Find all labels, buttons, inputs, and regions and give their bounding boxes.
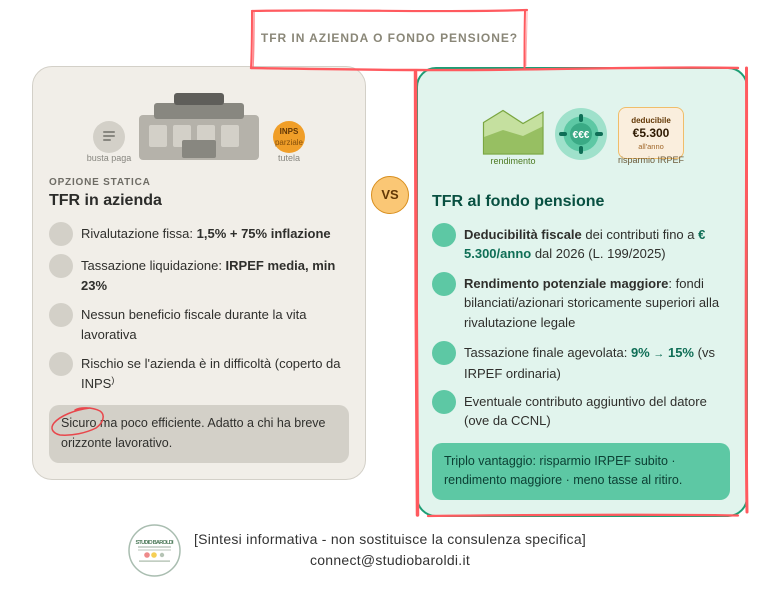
list item 4: Eventuale contributo aggiuntivo del datore — [464, 394, 707, 408]
list item 3: Tassazione finale agevolata: 9% → 15% (vs — [464, 344, 715, 360]
list item 2: 23% — [81, 278, 107, 292]
list item 1 — [432, 223, 706, 261]
list item 3 — [49, 303, 306, 342]
heading: TFR al fondo pensione: TFR al fondo pensione — [432, 193, 604, 210]
card: deducibile — [618, 107, 684, 159]
list item 1: 5.300/anno dal 2026 (L. 199/2025) — [464, 246, 666, 261]
callout: azienda — [49, 405, 349, 463]
heading: TFR in azienda: TFR in azienda — [49, 192, 162, 209]
list item 4 — [432, 390, 707, 428]
label: risparmio IRPEF: risparmio IRPEF — [618, 155, 684, 165]
callout: azienda: Sicuro ma poco efficiente. Adatto a chi ha breve — [61, 416, 326, 430]
badge: VS — [371, 176, 409, 214]
icon: azienda building — [139, 93, 259, 160]
callout: azienda: orizzonte lavorativo. — [61, 436, 172, 450]
list item 2: bilanciati/azionari storicamente superiori alla — [464, 295, 719, 310]
list item 4: (ove da CCNL) — [464, 413, 551, 428]
list item 2: Tassazione liquidazione: IRPEF media, min — [81, 258, 335, 273]
label: rendimento: rendimento — [490, 156, 536, 166]
list item 1 — [49, 222, 331, 246]
logo: Studio Baroldi: STUDIO BAROLDI — [136, 540, 174, 546]
list item 3: IRPEF ordinaria) — [464, 366, 561, 381]
callout: fondo pensione — [432, 443, 730, 500]
list item 2: rivalutazione legale — [464, 314, 575, 330]
list item 2: Rendimento potenziale maggiore: fondi — [464, 276, 704, 290]
footer text: [Sintesi informativa - non sostituisce la consulenza specifica] — [194, 531, 586, 547]
list item 4: INPS) — [81, 374, 114, 390]
list item 2 — [432, 272, 720, 330]
list item 1: Rivalutazione fissa: 1,5% + 75% inflazione — [81, 226, 331, 241]
list item 3: lavorativa — [81, 326, 137, 342]
callout: fondo pensione: rendimento maggiore · meno tasse al ritiro. — [444, 473, 682, 487]
title: TFR IN AZIENDA O FONDO PENSIONE? — [261, 31, 518, 45]
list item 3 — [432, 341, 715, 381]
list item 1: Deducibilità fiscale dei contributi fino a € — [464, 226, 705, 242]
list item 4: Rischio se l'azienda è in difficoltà (coperto da — [81, 356, 340, 371]
card: deducibile: deducibile — [631, 116, 671, 124]
label: busta paga: busta paga — [87, 153, 131, 163]
logo: Studio Baroldi — [128, 524, 181, 577]
icon: rendimento area chart — [482, 110, 544, 155]
icon: target euro — [555, 108, 607, 160]
list item 4 — [49, 352, 340, 390]
panel: TFR al fondo pensione — [416, 67, 748, 517]
icon: busta paga — [93, 121, 125, 153]
eyebrow: opzione statica: OPZIONE STATICA — [49, 177, 151, 188]
list item 2 — [49, 254, 335, 292]
card: deducibile: all'anno — [638, 142, 664, 151]
list item 3: Nessun beneficio fiscale durante la vita — [81, 307, 306, 322]
footer text — [194, 531, 586, 568]
label: tutela: tutela — [278, 153, 300, 163]
icon: target euro: €€€ — [573, 130, 590, 141]
panel: TFR in azienda — [32, 66, 366, 480]
icon: INPS parziale: parziale — [275, 138, 303, 147]
icon: INPS parziale — [273, 121, 305, 153]
callout: fondo pensione: Triplo vantaggio: risparmio IRPEF subito · — [444, 454, 676, 468]
footer text: connect@studiobaroldi.it — [310, 552, 470, 568]
icon: INPS parziale: INPS — [280, 127, 298, 136]
card: deducibile: €5.300 — [633, 126, 669, 140]
badge: VS: VS — [381, 187, 399, 202]
